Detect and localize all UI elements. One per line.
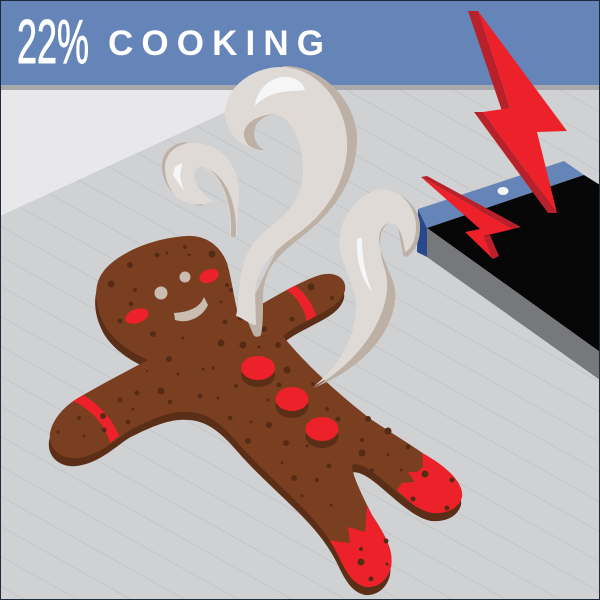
right arm stripe [286, 286, 316, 321]
steam: large centre wisp [225, 66, 357, 337]
face [123, 266, 221, 327]
body shadow [49, 244, 461, 595]
left arm stripe [73, 395, 119, 443]
gingerbread man [49, 236, 470, 595]
steam: right wisp [313, 189, 420, 388]
heading: COOKING: COOKING [108, 24, 324, 63]
header shadow strip [0, 85, 600, 90]
body [50, 236, 462, 587]
icon: large lightning bolt [468, 11, 567, 213]
header band [0, 0, 600, 85]
right leg icing [397, 452, 462, 514]
heading: 22%: 22% [17, 8, 89, 77]
icon: small lightning bolt [421, 176, 521, 259]
left leg icing [330, 505, 392, 588]
dots [56, 245, 410, 506]
button 2 [276, 387, 308, 418]
stove [417, 161, 600, 380]
dots on stripes and icing [100, 413, 454, 582]
steam: left wisp [162, 142, 239, 237]
button 1 [241, 356, 275, 387]
icing and stripes [73, 284, 470, 595]
button 3 [306, 417, 338, 448]
